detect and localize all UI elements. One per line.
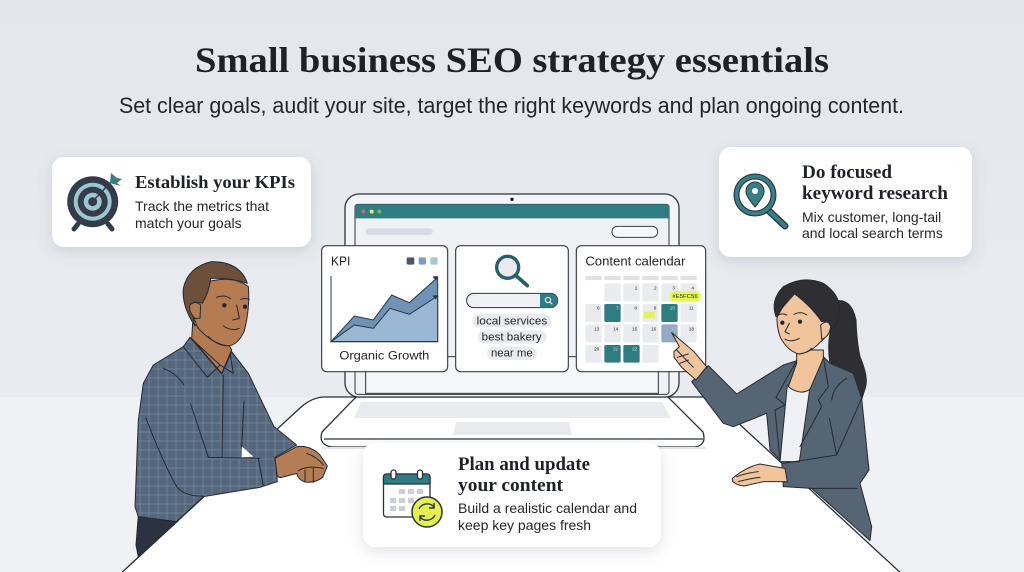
calendar numbers: 6 xyxy=(597,306,600,311)
card body: match your goals xyxy=(135,215,242,231)
calendar numbers: 17 xyxy=(671,326,677,331)
laptop screen xyxy=(322,198,706,394)
calendar numbers: 7 xyxy=(616,306,619,311)
man ear xyxy=(190,302,201,318)
KPI caption: Organic Growth xyxy=(339,348,429,362)
man facial features xyxy=(208,296,249,346)
woman jacket xyxy=(692,357,872,541)
calendar numbers: 11 xyxy=(689,306,694,311)
icon: magnifier with pin xyxy=(736,176,785,226)
calendar numbers: 8 xyxy=(634,306,637,311)
man at the table xyxy=(135,262,327,557)
man hands xyxy=(275,446,327,482)
weekday bars xyxy=(585,276,697,280)
calendar heading: Content calendar xyxy=(585,254,685,268)
calendar numbers: 22 xyxy=(632,347,638,352)
yellow calendar tags: #E5FC56 xyxy=(672,294,698,300)
calendar numbers: 2 xyxy=(654,286,657,291)
calendar numbers: 9 xyxy=(654,306,657,311)
KPI heading: KPI xyxy=(331,255,350,269)
calendar numbers: 15 xyxy=(632,326,638,331)
man shirt xyxy=(135,337,297,522)
woman hair xyxy=(774,280,839,330)
icon: magnifier xyxy=(497,256,527,286)
man neck xyxy=(192,323,232,373)
card: Do focused keyword research xyxy=(719,147,972,257)
calendar numbers: 3 xyxy=(672,286,675,291)
card heading: your content xyxy=(458,476,564,496)
card: Plan and update your content xyxy=(363,443,661,547)
calendar numbers: 14 xyxy=(613,326,619,331)
woman ear xyxy=(821,322,831,339)
calendar cells xyxy=(585,283,697,363)
man trousers xyxy=(136,515,178,557)
man face xyxy=(194,279,249,346)
woman top xyxy=(780,385,810,462)
card heading: keyword research xyxy=(802,184,949,204)
browser bar xyxy=(355,204,669,218)
area chart xyxy=(331,276,438,342)
card heading xyxy=(802,163,949,204)
panel: content calendar xyxy=(576,246,706,372)
calendar numbers: 10 xyxy=(670,306,675,311)
calendar numbers: 20 xyxy=(594,347,600,352)
keyword chips: local services xyxy=(477,315,548,327)
card body: Track the metrics that xyxy=(135,198,269,214)
card body: Mix customer, long-tail xyxy=(802,209,941,225)
card body: and local search terms xyxy=(802,225,943,241)
laptop lid xyxy=(345,194,679,397)
woman lapels and folds xyxy=(775,357,862,488)
card heading: Plan and update xyxy=(458,455,590,475)
calendar numbers: 16 xyxy=(651,326,657,331)
title: Small business SEO strategy essentials xyxy=(195,40,829,80)
man shirt folds xyxy=(146,337,263,496)
card body: keep key pages fresh xyxy=(458,517,591,533)
calendar numbers: 1 xyxy=(635,286,638,291)
woman at the table xyxy=(672,280,872,541)
man hair xyxy=(183,262,247,326)
calendar numbers: 18 xyxy=(689,326,694,331)
card: Establish your KPIs xyxy=(52,157,311,247)
legend squares xyxy=(407,257,438,265)
calendar numbers: 13 xyxy=(594,326,600,331)
woman facial features xyxy=(778,313,812,354)
keyword chips xyxy=(473,314,552,360)
card heading xyxy=(458,455,590,496)
calendar numbers: 4 xyxy=(691,286,694,291)
panel: KPI chart xyxy=(322,246,448,372)
woman resting hand xyxy=(732,464,787,486)
table xyxy=(118,397,904,572)
man torso gap xyxy=(242,447,253,457)
icon: target xyxy=(67,173,122,229)
laptop xyxy=(321,194,706,449)
search bar xyxy=(467,293,558,308)
panel: keyword search xyxy=(456,246,568,372)
calendar numbers: 21 xyxy=(613,347,619,352)
calendar numbers xyxy=(594,286,694,352)
card heading: Establish your KPIs xyxy=(135,172,295,192)
woman neck xyxy=(788,350,823,392)
laptop base xyxy=(321,397,706,449)
icon: calendar with refresh xyxy=(384,470,442,527)
subtitle: Set clear goals, audit your site, target the right keywords and plan ongoing content. xyxy=(119,93,904,118)
card body: Build a realistic calendar and xyxy=(458,500,637,516)
keyword chips: near me xyxy=(491,348,533,360)
card heading: Do focused xyxy=(802,163,893,183)
keyword chips: best bakery xyxy=(482,332,542,344)
woman pointing hand xyxy=(672,333,707,380)
woman face xyxy=(777,293,828,354)
woman ponytail xyxy=(829,301,866,399)
